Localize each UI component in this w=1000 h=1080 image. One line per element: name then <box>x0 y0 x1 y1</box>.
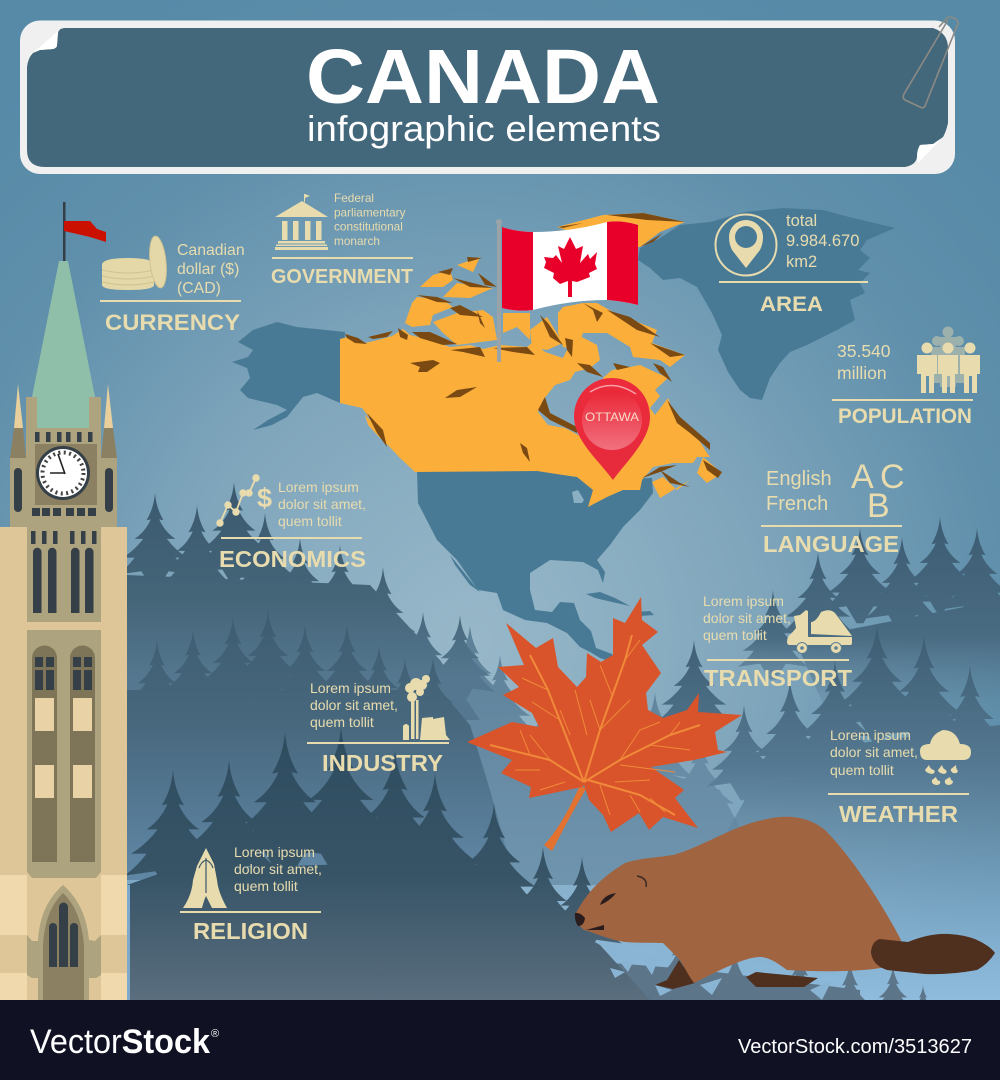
icon: letters: C <box>880 458 905 496</box>
icon: location pin in circle <box>716 214 776 276</box>
national flag of Canada <box>496 219 638 362</box>
weather text: dolor sit amet, <box>830 744 918 760</box>
government text: monarch <box>334 234 380 248</box>
forest: middle right layer <box>662 628 1000 879</box>
panel: government <box>271 191 413 288</box>
currency text: Canadian <box>177 242 245 259</box>
religion heading: RELIGION <box>193 918 308 944</box>
government text: parliamentary <box>334 206 406 220</box>
pin: Ottawa: OTTAWA <box>585 410 639 424</box>
forest: far haze layer <box>466 626 735 885</box>
panel: economics <box>216 474 366 572</box>
Peace Tower <box>0 202 127 1000</box>
panel: currency <box>100 235 245 335</box>
transport text: quem tollit <box>703 627 767 643</box>
language heading: LANGUAGE <box>763 531 899 557</box>
area text: km2 <box>786 253 817 271</box>
area text: total <box>786 212 817 230</box>
economics heading: ECONOMICS <box>219 546 366 572</box>
icon: growth chart and dollar: $ <box>257 483 272 513</box>
economics text: dolor sit amet, <box>278 496 366 512</box>
panel: weather <box>828 727 971 827</box>
religion text: dolor sit amet, <box>234 861 322 877</box>
paper clip <box>903 17 958 108</box>
spire <box>32 261 95 428</box>
religion text: quem tollit <box>234 878 298 894</box>
icon: people <box>917 326 980 393</box>
clock <box>36 446 90 500</box>
forest: upper right layer <box>738 518 1000 702</box>
language text: English <box>766 468 832 490</box>
government heading: GOVERNMENT <box>271 266 413 288</box>
religion text: Lorem ipsum <box>234 844 315 860</box>
forest: middle left layer <box>127 614 510 880</box>
transport text: dolor sit amet, <box>703 610 791 626</box>
header banner <box>20 17 958 174</box>
icon: growth chart and dollar <box>216 474 272 527</box>
currency text: dollar ($) <box>177 261 239 278</box>
corner curls <box>33 31 58 53</box>
currency text: (CAD) <box>177 280 221 297</box>
footer bar: ® <box>211 1028 219 1040</box>
weather heading: WEATHER <box>839 801 958 827</box>
icon: praying hands <box>183 848 227 908</box>
pin: Ottawa <box>574 378 650 480</box>
industry text: dolor sit amet, <box>310 697 398 713</box>
transport heading: TRANSPORT <box>704 665 852 691</box>
population text: 35.540 <box>837 341 891 361</box>
industry text: quem tollit <box>310 714 374 730</box>
clock section <box>10 384 117 527</box>
subtitle: infographic elements <box>307 108 661 149</box>
tower door <box>27 885 101 1000</box>
government text: Federal <box>334 191 374 205</box>
government text: constitutional <box>334 220 403 234</box>
leaf chips between the trees <box>605 945 832 1000</box>
population text: million <box>837 363 887 383</box>
forest: bottom strip behind beaver <box>616 953 927 1000</box>
panel: language <box>761 458 905 557</box>
economics text: Lorem ipsum <box>278 479 359 495</box>
panel: area <box>716 212 868 316</box>
map: Canada <box>340 213 722 507</box>
panel: population <box>832 326 980 428</box>
panel: religion <box>180 844 322 944</box>
icon: factory <box>403 675 450 740</box>
panel: industry <box>307 675 450 776</box>
language text: French <box>766 493 828 515</box>
weather text: Lorem ipsum <box>830 727 911 743</box>
maple leaf <box>467 597 742 851</box>
VectorStock logo: VectorStock <box>30 1023 210 1061</box>
title: CANADA <box>306 34 660 120</box>
beaver <box>575 817 995 989</box>
forest: front layer <box>127 720 657 1000</box>
icon: dump truck <box>787 610 852 654</box>
economics text: quem tollit <box>278 513 342 529</box>
currency heading: CURRENCY <box>105 310 240 335</box>
forest: upper left layer <box>127 482 494 720</box>
transport text: Lorem ipsum <box>703 593 784 609</box>
weather text: quem tollit <box>830 762 894 778</box>
industry heading: INDUSTRY <box>322 750 443 776</box>
area text: 9.984.670 <box>786 232 859 250</box>
icon: letters: A <box>851 458 874 496</box>
area heading: AREA <box>760 293 823 316</box>
image reference: VectorStock.com/3513627 <box>738 1036 972 1058</box>
icon: rain cloud <box>920 730 971 785</box>
tower flag <box>63 202 106 262</box>
population heading: POPULATION <box>838 405 972 428</box>
icon: letters: B <box>867 487 890 525</box>
icon: parliament building <box>275 194 328 250</box>
footer bar <box>0 1000 1000 1080</box>
icon: coins <box>102 235 169 290</box>
map: Alaska <box>232 322 345 430</box>
tower body <box>0 527 127 1000</box>
map: Greenland <box>638 208 895 400</box>
panel: transport <box>703 593 852 691</box>
map: United States, Mexico and Central America <box>417 470 654 664</box>
industry text: Lorem ipsum <box>310 680 391 696</box>
